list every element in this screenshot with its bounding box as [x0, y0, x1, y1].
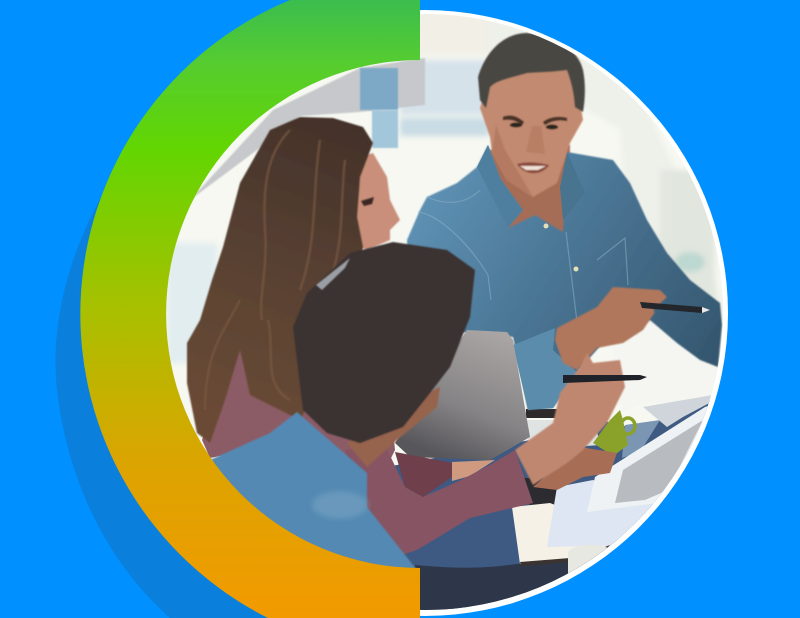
woman: forearm and raised hand — [515, 353, 625, 485]
green mug — [593, 410, 635, 456]
white photo circle — [122, 10, 728, 616]
man: hand — [555, 287, 667, 370]
table — [394, 400, 710, 610]
dark band behind the laptop — [526, 409, 558, 418]
notebook — [512, 503, 608, 564]
laptop — [395, 330, 530, 460]
man: collar right — [560, 152, 585, 220]
gradient ring — [80, 0, 420, 618]
front man — [210, 242, 475, 590]
front man: hair — [293, 242, 475, 443]
woman — [186, 116, 401, 458]
photo: meeting scene — [166, 14, 723, 610]
man: pen — [640, 302, 710, 313]
woman: far sleeve — [395, 452, 453, 497]
woman: sweater — [202, 350, 395, 458]
spreadsheet page — [587, 406, 708, 512]
spreadsheet table — [615, 420, 703, 503]
woman: near sleeve — [345, 445, 533, 562]
man: face details — [492, 116, 567, 197]
window behind the arm — [612, 322, 722, 412]
front man: shirt — [210, 412, 417, 590]
man: sleeve — [513, 328, 577, 410]
cup on table — [568, 544, 608, 574]
man: collar left — [477, 145, 523, 228]
woman: hair highlights — [205, 130, 345, 410]
woman: lower hand — [533, 447, 617, 490]
woman: face — [356, 152, 401, 250]
man: neck — [488, 145, 570, 240]
front man: hair highlight — [316, 258, 350, 290]
man: shirt — [407, 145, 722, 410]
woman: arms and hands — [366, 354, 626, 554]
shadow crescent — [56, 190, 320, 618]
man: shirt seams — [418, 190, 628, 330]
woman: eye — [361, 197, 374, 206]
front man: shirt highlight — [312, 491, 368, 519]
man: hair — [478, 33, 585, 112]
back paper — [643, 395, 711, 427]
document sheet — [547, 480, 655, 547]
papers and notebook — [512, 395, 711, 574]
man: shirt buttons — [544, 224, 578, 272]
man in denim shirt — [407, 33, 722, 410]
woman: hair — [187, 117, 373, 443]
woman: pen — [563, 375, 647, 383]
woman: far wrist — [452, 460, 495, 481]
office background — [166, 14, 723, 466]
man: face — [480, 62, 583, 197]
pale area behind the laptop — [527, 420, 598, 446]
front man: neck and ear — [347, 387, 440, 467]
